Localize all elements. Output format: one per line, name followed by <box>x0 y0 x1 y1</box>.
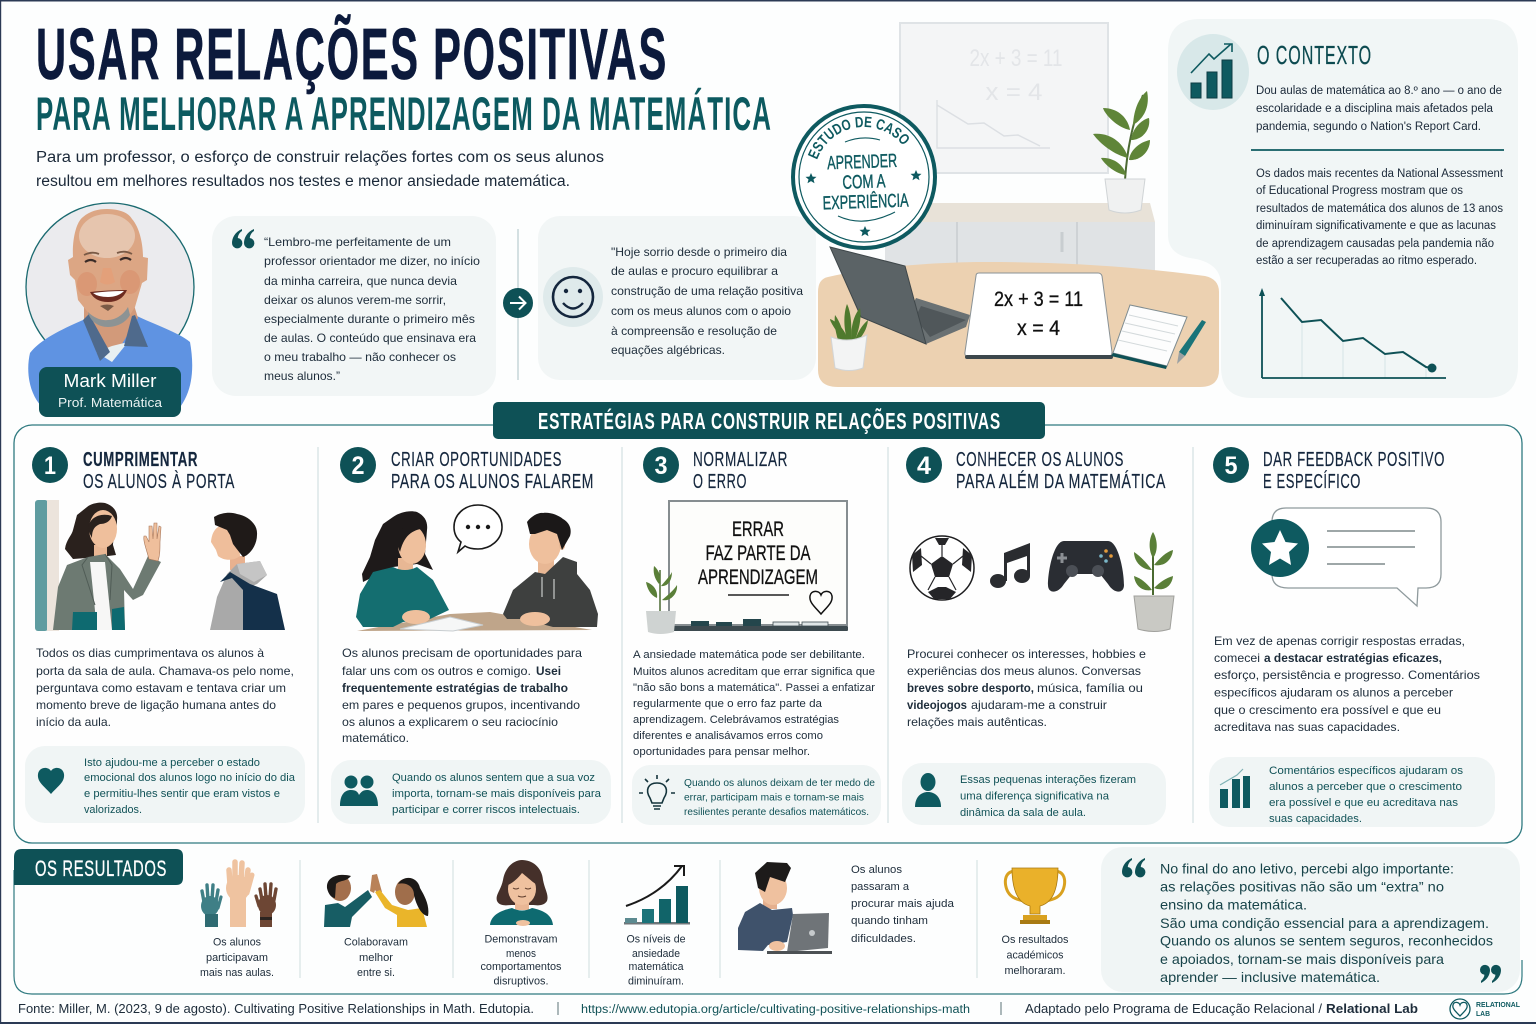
caption: Colaboravam <box>344 936 408 948</box>
context paragraph 2: of Educational Progress mostram que os <box>1256 185 1463 197</box>
heading 4 <box>956 449 1166 493</box>
heading 2: CRIAR OPORTUNIDADES <box>391 449 562 471</box>
strategy 2 <box>331 447 611 824</box>
icon: feedback speech bubble <box>1251 508 1441 606</box>
whiteboard: 2x + 3 = 11 <box>970 45 1062 72</box>
number 3 <box>643 447 679 483</box>
icon: two people <box>340 776 378 806</box>
badge: case study stamp: APRENDER <box>827 151 898 174</box>
closing quote text: as relações positivas não são um “extra” no <box>1160 880 1444 894</box>
callout text 2: importa, tornam-se mais disponíveis para <box>392 788 602 800</box>
tablet with equation: 2x + 3 = 11 <box>994 288 1083 311</box>
body text 3: diferentes e analisávamos erros como <box>633 730 823 742</box>
heading 5 <box>1263 449 1445 493</box>
callout text 4: uma diferença significativa na <box>960 790 1110 802</box>
body text 1 <box>36 646 294 729</box>
heading: results: OS RESULTADOS <box>35 856 167 881</box>
name tag: Mark Miller <box>64 371 157 391</box>
plant on cabinet <box>1093 91 1150 213</box>
callout text 2: Quando os alunos sentem que a sua voz <box>392 772 595 784</box>
callout 4 <box>902 763 1166 825</box>
body text 1: porta da sala de aula. Chamava-os pelo nome, <box>36 664 294 678</box>
caption <box>1002 934 1069 977</box>
heading banner: strategies <box>493 402 1045 439</box>
logo: Relational Lab: RELATIONAL <box>1476 1002 1521 1009</box>
heading 1: CUMPRIMENTAR <box>83 449 198 471</box>
quote text: meus alunos.” <box>264 369 340 383</box>
context paragraph 2: diminuíram significativamente e que as lacunas <box>1256 220 1496 232</box>
closing quote text: Quando os alunos se sentem seguros, reconhecidos <box>1160 934 1493 948</box>
body text 3: regularmente que o erro faz parte da <box>633 698 823 710</box>
callout text 1: valorizados. <box>84 804 142 816</box>
callout text 3: errar, participam mais e tornam-se mais <box>684 792 864 804</box>
body text 4: breves sobre desporto, <box>907 681 1034 695</box>
closing quote text: No final do ano letivo, percebi algo importante: <box>1160 862 1454 876</box>
callout text 5: Comentários específicos ajudaram os <box>1269 765 1463 777</box>
badge: case study stamp <box>791 104 937 250</box>
caption: Demonstravam <box>484 934 558 946</box>
body text 3: A ansiedade matemática pode ser debilitante. <box>633 649 865 661</box>
callout text 3 <box>684 777 875 818</box>
body text 2: os alunos a explicarem o seu raciocínio <box>342 715 558 729</box>
caption: participavam <box>206 952 268 964</box>
heading 4: PARA ALÉM DA MATEMÁTICA <box>956 470 1166 493</box>
reflection text: construção de uma relação positiva <box>611 284 803 298</box>
callout text 1: emocional dos alunos logo no início do dia <box>84 772 296 784</box>
reflection text: equações algébricas. <box>611 343 725 357</box>
body text 2 <box>342 646 582 745</box>
caption: melhoraram. <box>1004 965 1066 977</box>
closing quote text: e apoiados, tornam-se mais disponíveis para <box>1160 952 1444 967</box>
body text 2: falar uns com os outros e comigo. <box>342 664 531 678</box>
callout 2 <box>331 760 611 824</box>
heading 1 <box>83 449 235 493</box>
heading 2 <box>391 449 594 493</box>
illustration: classroom scene <box>818 23 1219 387</box>
body text 3: Muitos alunos acreditam que errar significa que <box>633 666 875 678</box>
logo: Relational Lab <box>1450 999 1521 1019</box>
heading 3: O ERRO <box>693 471 747 493</box>
tablet with equation <box>965 273 1113 359</box>
illustration: whiteboard: ERRAR <box>732 518 784 541</box>
icon: arrow <box>503 288 533 318</box>
context paragraph 2: Os dados mais recentes da National Assessment <box>1256 168 1504 180</box>
context paragraph 2 <box>1256 168 1504 267</box>
callout text 1: e permitiu-lhes sentir que eram vistos e <box>84 788 280 800</box>
footer: source <box>18 1002 1418 1016</box>
body text 4: relações mais autênticas. <box>907 715 1047 729</box>
body text 2: matemático. <box>342 731 409 745</box>
icon: music notes <box>990 543 1030 588</box>
panel frame: strategies <box>14 425 1522 843</box>
notebook and pen <box>1111 305 1206 369</box>
caption: disruptivos. <box>494 976 548 988</box>
subtitle: PARA MELHORAR A APRENDIZAGEM DA MATEMÁTICA <box>36 87 772 140</box>
icon: growth bars <box>1220 769 1250 808</box>
body text 5: comecei <box>1214 651 1260 665</box>
icon: growth chart <box>1177 34 1249 110</box>
caption: procurar mais ajuda <box>851 898 955 910</box>
number 5: 5 <box>1224 452 1238 480</box>
caption: melhor <box>359 952 393 964</box>
caption: comportamentos <box>480 961 562 973</box>
intro text: resultou em melhores resultados nos testes e menor ansiedade matemática. <box>36 173 570 190</box>
caption: Os níveis de <box>626 934 686 946</box>
heading 1: OS ALUNOS À PORTA <box>83 470 235 493</box>
illustration: whiteboard: FAZ PARTE DA <box>706 542 810 565</box>
icon: opening quote <box>232 229 254 248</box>
quote text <box>264 235 480 383</box>
name tag <box>39 367 181 417</box>
panel: quote after <box>538 216 816 380</box>
number 4 <box>906 447 942 483</box>
callout text 4: Essas pequenas interações fizeram <box>960 774 1136 786</box>
panel: context <box>1168 19 1518 398</box>
panel frame: results <box>14 870 1522 994</box>
caption: Os alunos <box>851 864 902 876</box>
strategy 4 <box>902 447 1174 825</box>
callout text 5: era possível e que eu acreditava nas <box>1269 797 1458 809</box>
context paragraph 2: resultados de matemática dos alunos de 13 anos <box>1256 203 1503 215</box>
body text 1: perguntava como estavam e tentava criar um <box>36 681 286 695</box>
icon: opening quote <box>1122 858 1145 877</box>
number 2 <box>340 447 376 483</box>
body text 1: Todos os dias cumprimentava os alunos à <box>36 646 264 660</box>
body text 5: específicos ajudaram os alunos a perceber <box>1214 686 1453 700</box>
caption: passaram a <box>851 881 910 893</box>
icon: rising bars <box>624 866 690 924</box>
callout text 5: alunos a perceber que o crescimento <box>1269 781 1462 793</box>
badge: case study stamp: ESTUDO DE CASO <box>808 116 909 160</box>
footer: source: Adaptado pelo Programa de Educação Relacional / <box>1025 1002 1323 1016</box>
icon: heart <box>38 768 64 794</box>
footer: source: https://www.edutopia.org/article/cultivating-positive-relationships-math <box>581 1004 970 1016</box>
context paragraph 2: de aprendizagem causadas pela pandemia não <box>1256 238 1494 250</box>
illustration: students talking <box>356 505 598 631</box>
whiteboard: x = 4 <box>986 79 1042 106</box>
caption <box>200 936 274 979</box>
callout text 2: participar e correr riscos intelectuais. <box>392 804 580 816</box>
callout 5 <box>1209 757 1495 827</box>
small plant <box>830 304 868 370</box>
heading 4: CONHECER OS ALUNOS <box>956 449 1124 471</box>
number 5 <box>1213 447 1249 483</box>
result 2: collaboration <box>324 874 428 979</box>
strategy 5 <box>1209 447 1495 827</box>
icon: closing quote <box>1480 965 1501 983</box>
body text 3: "não são bons a matemática". Passei a enfatizar <box>633 682 875 694</box>
caption: diminuíram. <box>628 976 684 988</box>
caption <box>851 864 955 945</box>
heading 5: E ESPECÍFICO <box>1263 470 1361 493</box>
number 1: 1 <box>44 452 56 480</box>
body text 3: oportunidades para pensar melhor. <box>633 746 810 758</box>
callout text 4: dinâmica da sala de aula. <box>960 807 1086 819</box>
quote text: especialmente durante o primeiro mês <box>264 312 475 326</box>
quote text: professor orientador me dizer, no início <box>264 254 480 268</box>
result 4: less anxiety <box>624 866 690 988</box>
caption: quando tinham <box>851 915 928 927</box>
line chart: declining scores <box>1259 288 1446 378</box>
closing quote text: São uma condição essencial para a aprendizagem. <box>1160 916 1489 931</box>
context paragraph 2: estão a ser recuperadas ao ritmo esperado. <box>1256 255 1477 267</box>
body text 5: que o crescimento era possível e que eu <box>1214 703 1441 717</box>
icon: potted plant <box>1134 532 1174 632</box>
strategy 3 <box>632 447 881 825</box>
body text 5: acreditava nas suas capacidades. <box>1214 720 1400 734</box>
body text 4: experiências dos meus alunos. Conversas <box>907 664 1141 678</box>
title: USAR RELAÇÕES POSITIVAS <box>36 14 668 95</box>
reflection text: com os meus alunos com o apoio <box>611 304 791 318</box>
icon: trophy <box>1005 868 1065 924</box>
body text 2: em pares e pequenos grupos, incentivando <box>342 698 580 712</box>
reflection text: de aulas e procuro equilibrar a <box>611 264 778 278</box>
footer: source: Fonte: Miller, M. (2023, 9 de agosto). Cultivating Positive Relationships in Math. Edutopia. <box>18 1002 534 1016</box>
icon: game controller <box>1048 541 1124 592</box>
laptop <box>830 247 970 344</box>
icon: person <box>915 773 941 807</box>
closing quote text: ensino da matemática. <box>1160 898 1307 912</box>
icon: soccer ball <box>910 536 974 600</box>
logo: Relational Lab: LAB <box>1476 1011 1490 1018</box>
panel: closing quote <box>1101 847 1520 992</box>
body text 4: videojogos <box>907 698 967 712</box>
body text 2: Os alunos precisam de oportunidades para <box>342 646 582 660</box>
context paragraph 1: Dou aulas de matemática ao 8.º ano — o ano de <box>1256 85 1502 97</box>
number 1 <box>32 447 68 483</box>
quote text: deixar os alunos verem-me sorrir, <box>264 293 446 307</box>
body text 2: Usei <box>536 664 561 678</box>
caption: matemática <box>628 961 684 973</box>
caption <box>626 934 686 988</box>
body text 5: Em vez de apenas corrigir respostas erradas, <box>1214 634 1465 648</box>
caption: menos <box>506 948 536 960</box>
reflection text: "Hoje sorrio desde o primeiro dia <box>611 245 787 259</box>
intro text <box>36 149 604 190</box>
reflection text: à compreensão e resolução de <box>611 324 777 338</box>
heading 3 <box>693 449 788 493</box>
callout text 1: Isto ajudou-me a perceber o estado <box>84 757 260 769</box>
closing quote text: aprender — inclusive matemática. <box>1160 970 1380 985</box>
name tag: Prof. Matemática <box>58 396 162 410</box>
badge: case study stamp: EXPERIÊNCIA <box>822 189 909 214</box>
illustration: teacher greeting student <box>35 500 285 631</box>
context paragraph 1: pandemia, segundo o Nation's Report Card. <box>1256 121 1481 133</box>
callout 3 <box>632 765 881 825</box>
result 6: academic results <box>1002 868 1069 977</box>
caption: dificuldades. <box>851 933 916 945</box>
closing quote text <box>1160 862 1493 985</box>
body text 4: ajudaram-me a construir <box>971 698 1107 712</box>
heading 2: PARA OS ALUNOS FALAREM <box>391 471 594 493</box>
icon: raised hands <box>201 862 276 927</box>
icon: smiley <box>543 267 603 327</box>
heading: results <box>14 849 183 885</box>
callout text 2 <box>392 772 602 816</box>
cabinet <box>885 203 1155 272</box>
number 3: 3 <box>654 452 668 480</box>
body text 3 <box>633 649 875 758</box>
callout text 1 <box>84 757 296 816</box>
callout text 5: suas capacidades. <box>1269 813 1362 825</box>
callout text 4 <box>960 774 1136 819</box>
result 3: calmer behavior <box>480 860 562 988</box>
quote text: “Lembro-me perfeitamente de um <box>264 235 451 249</box>
callout text 5 <box>1269 765 1463 825</box>
caption: entre si. <box>357 967 395 979</box>
body text 5 <box>1214 634 1480 734</box>
quote text: da minha carreira, que nunca devia <box>264 274 457 288</box>
body text 4: Procurei conhecer os interesses, hobbies e <box>907 647 1146 661</box>
body text 1: momento breve de ligação humana antes do <box>36 698 276 712</box>
whiteboard <box>900 23 1108 173</box>
icon: high five <box>324 874 428 927</box>
caption: mais nas aulas. <box>200 967 274 979</box>
context paragraph 1 <box>1256 85 1502 133</box>
result 1: participation <box>200 862 276 979</box>
body text 2: frequentemente estratégias de trabalho <box>342 681 568 695</box>
body text 4 <box>907 647 1146 729</box>
body text 4: música, família ou <box>1037 681 1143 695</box>
number 2: 2 <box>352 452 364 480</box>
caption: académicos <box>1006 950 1064 962</box>
reflection text <box>611 245 803 357</box>
callout text 3: Quando os alunos deixam de ter medo de <box>684 777 875 789</box>
caption <box>480 934 562 988</box>
body text 5: esforço, persistência e progresso. Comentários <box>1214 668 1480 682</box>
illustration: whiteboard <box>646 501 848 634</box>
callout 1 <box>25 746 305 823</box>
quote text: o meu trabalho — não conhecer os <box>264 350 456 364</box>
callout text 3: resilientes perante desafios matemáticos. <box>684 806 869 818</box>
caption: Os alunos <box>213 936 261 948</box>
icon: light bulb <box>639 775 675 809</box>
portrait: Mark Miller <box>26 203 194 410</box>
quote text: de aulas. O conteúdo que ensinava era <box>264 331 476 345</box>
footer: source: Relational Lab <box>1326 1002 1418 1016</box>
caption: ansiedade <box>632 948 680 960</box>
tablet with equation: x = 4 <box>1017 317 1060 340</box>
strategy 1 <box>25 447 305 823</box>
body text 3: aprendizagem. Celebrávamos estratégias <box>633 714 839 726</box>
context paragraph 1: escolaridade e a disciplina mais afetados pela <box>1256 103 1494 115</box>
number 4: 4 <box>917 452 931 480</box>
caption <box>344 936 408 979</box>
icon: calm girl <box>490 860 553 926</box>
result 5: seeking help <box>738 862 955 954</box>
icon: student at laptop <box>738 862 832 954</box>
heading 5: DAR FEEDBACK POSITIVO <box>1263 449 1445 471</box>
intro text: Para um professor, o esforço de construir relações fortes com os seus alunos <box>36 149 604 166</box>
illustration: whiteboard: APRENDIZAGEM <box>698 566 818 589</box>
heading banner: strategies: ESTRATÉGIAS PARA CONSTRUIR RELAÇÕES POSITIVAS <box>538 407 1001 434</box>
caption: Os resultados <box>1002 934 1069 946</box>
heading: O CONTEXTO <box>1257 40 1372 70</box>
body text 5: a destacar estratégias eficazes, <box>1264 651 1442 665</box>
body text 1: início da aula. <box>36 715 111 729</box>
badge: case study stamp: COM A <box>842 171 886 194</box>
table <box>818 262 1219 387</box>
panel: quote before <box>212 216 496 396</box>
heading 3: NORMALIZAR <box>693 449 788 471</box>
